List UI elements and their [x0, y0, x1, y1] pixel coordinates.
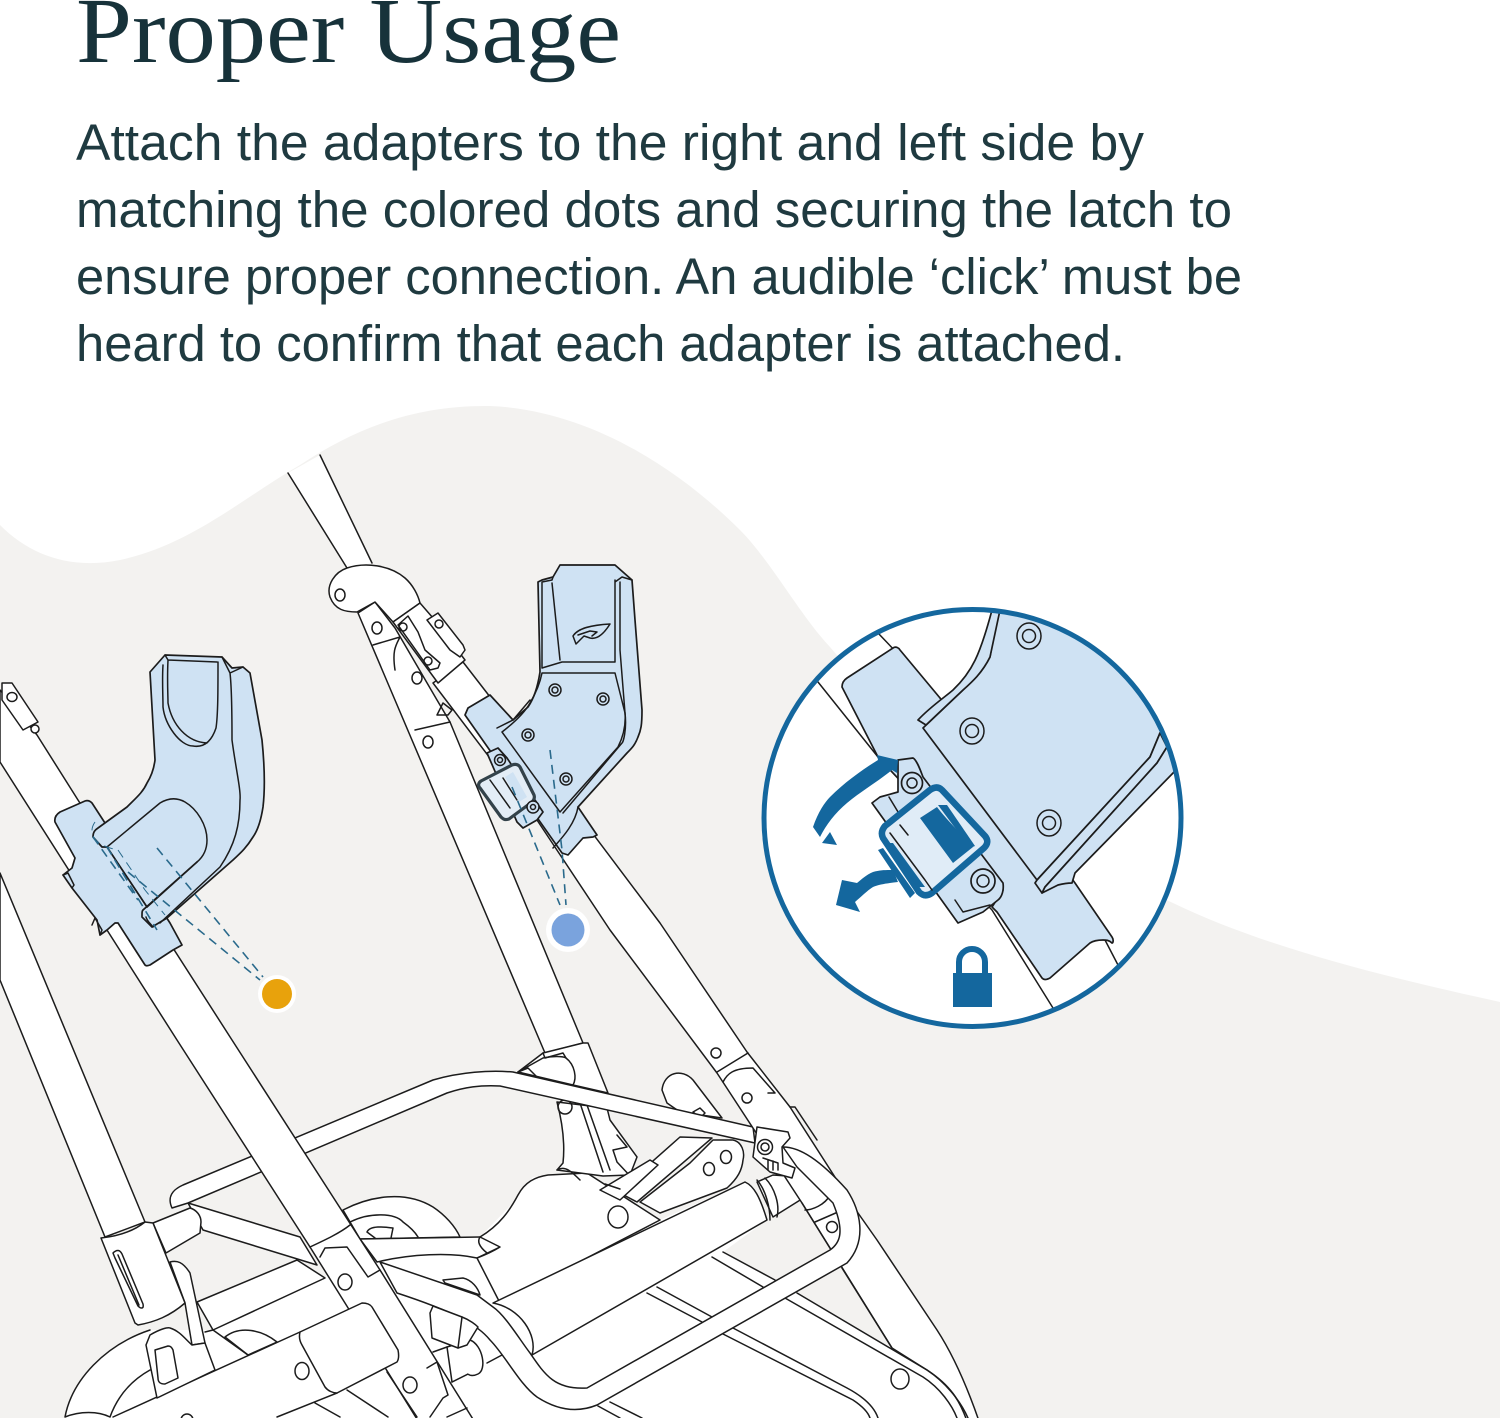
- frame: top handle rail: [170, 1071, 755, 1208]
- frame: upper tube to elbow: [288, 455, 372, 568]
- left adapter clamp: [55, 801, 182, 966]
- inset: pull down arrow: [836, 870, 898, 912]
- right adapter back plate: [487, 748, 543, 828]
- frame: bottom edge mask: [0, 1418, 1500, 1420]
- right adapter: [465, 565, 642, 952]
- stroller frame: [0, 455, 1500, 1420]
- frame: rear rail rim and lower rail: [785, 1293, 968, 1418]
- inset: tab lines: [889, 797, 990, 912]
- frame: long base line: [113, 1332, 300, 1417]
- inset: strap: [842, 647, 1113, 980]
- frame: top-left clip: [2, 683, 39, 733]
- frame: lower bracket: [146, 1328, 215, 1398]
- inset: circle border: [764, 610, 1181, 1026]
- inset: adapter rim: [918, 610, 1176, 893]
- frame: collar clips: [393, 603, 465, 683]
- instruction text: [76, 114, 1242, 372]
- frame: main tube lower details: [277, 1225, 467, 1417]
- frame: elbow: [329, 565, 420, 622]
- left adapter: [55, 655, 296, 1013]
- frame: crosstube through center: [360, 1225, 500, 1262]
- frame: front tube details: [711, 1048, 892, 1348]
- frame: far-left tube: [0, 873, 145, 1237]
- inset: latch screws: [902, 772, 995, 893]
- inset: screws: [960, 623, 1061, 836]
- orange dot: [258, 975, 296, 1013]
- frame: bottom rails: [598, 1252, 878, 1418]
- frame: wheel arcs: [65, 1197, 460, 1417]
- frame: lower cylinder and box: [430, 1306, 502, 1382]
- right adapter logo: [573, 624, 610, 644]
- frame: lower white body: [65, 1173, 968, 1418]
- left adapter inner lines: [107, 655, 243, 927]
- inset: handle tab: [878, 843, 925, 898]
- frame: roller tube: [493, 1178, 778, 1355]
- frame: center hinge cylinder: [757, 1175, 805, 1217]
- background blob: [0, 406, 1500, 1418]
- inset: tube edges: [818, 633, 1118, 1008]
- instruction text: matching the colored dots and securing the latch to: [76, 181, 1232, 238]
- right adapter screws: [522, 684, 609, 785]
- inset: latch back plate: [872, 758, 1003, 923]
- inset: latch inner handle: [890, 805, 975, 890]
- frame: central mechanism: [518, 1043, 744, 1213]
- frame: knob: [443, 1278, 480, 1295]
- blue dot: [546, 908, 590, 952]
- inset: rotate up arrow: [813, 755, 898, 845]
- right adapter outline: [465, 565, 642, 855]
- frame: front tube with bow: [433, 662, 980, 1420]
- frame: rail hole: [891, 1369, 909, 1389]
- inset: padlock: [953, 949, 992, 1007]
- frame: main left tube: [0, 690, 476, 1420]
- frame: back tube: [358, 602, 583, 1053]
- inset: latch frame: [882, 788, 987, 895]
- right adapter plate lines: [497, 577, 632, 848]
- right adapter latch: [479, 754, 539, 820]
- left adapter dashed guides: [92, 822, 263, 980]
- instruction text: Attach the adapters to the right and left side by: [76, 114, 1144, 171]
- instruction text: heard to confirm that each adapter is attached.: [76, 315, 1125, 372]
- frame: struts: [188, 1203, 317, 1265]
- inset detail circle: [762, 607, 1184, 1029]
- inset: adapter plate: [922, 614, 1160, 880]
- frame: central tube details: [373, 637, 452, 730]
- left adapter arm: [93, 655, 264, 927]
- right adapter dashed guides: [512, 750, 566, 905]
- frame: lower cross tube: [197, 1260, 325, 1330]
- frame: upper joint: [753, 1127, 795, 1178]
- frame: S-curve basket tube: [380, 1147, 860, 1410]
- instruction text: ensure proper connection. An audible ‘click’ must be: [76, 248, 1242, 305]
- frame: connector collar: [101, 1208, 205, 1345]
